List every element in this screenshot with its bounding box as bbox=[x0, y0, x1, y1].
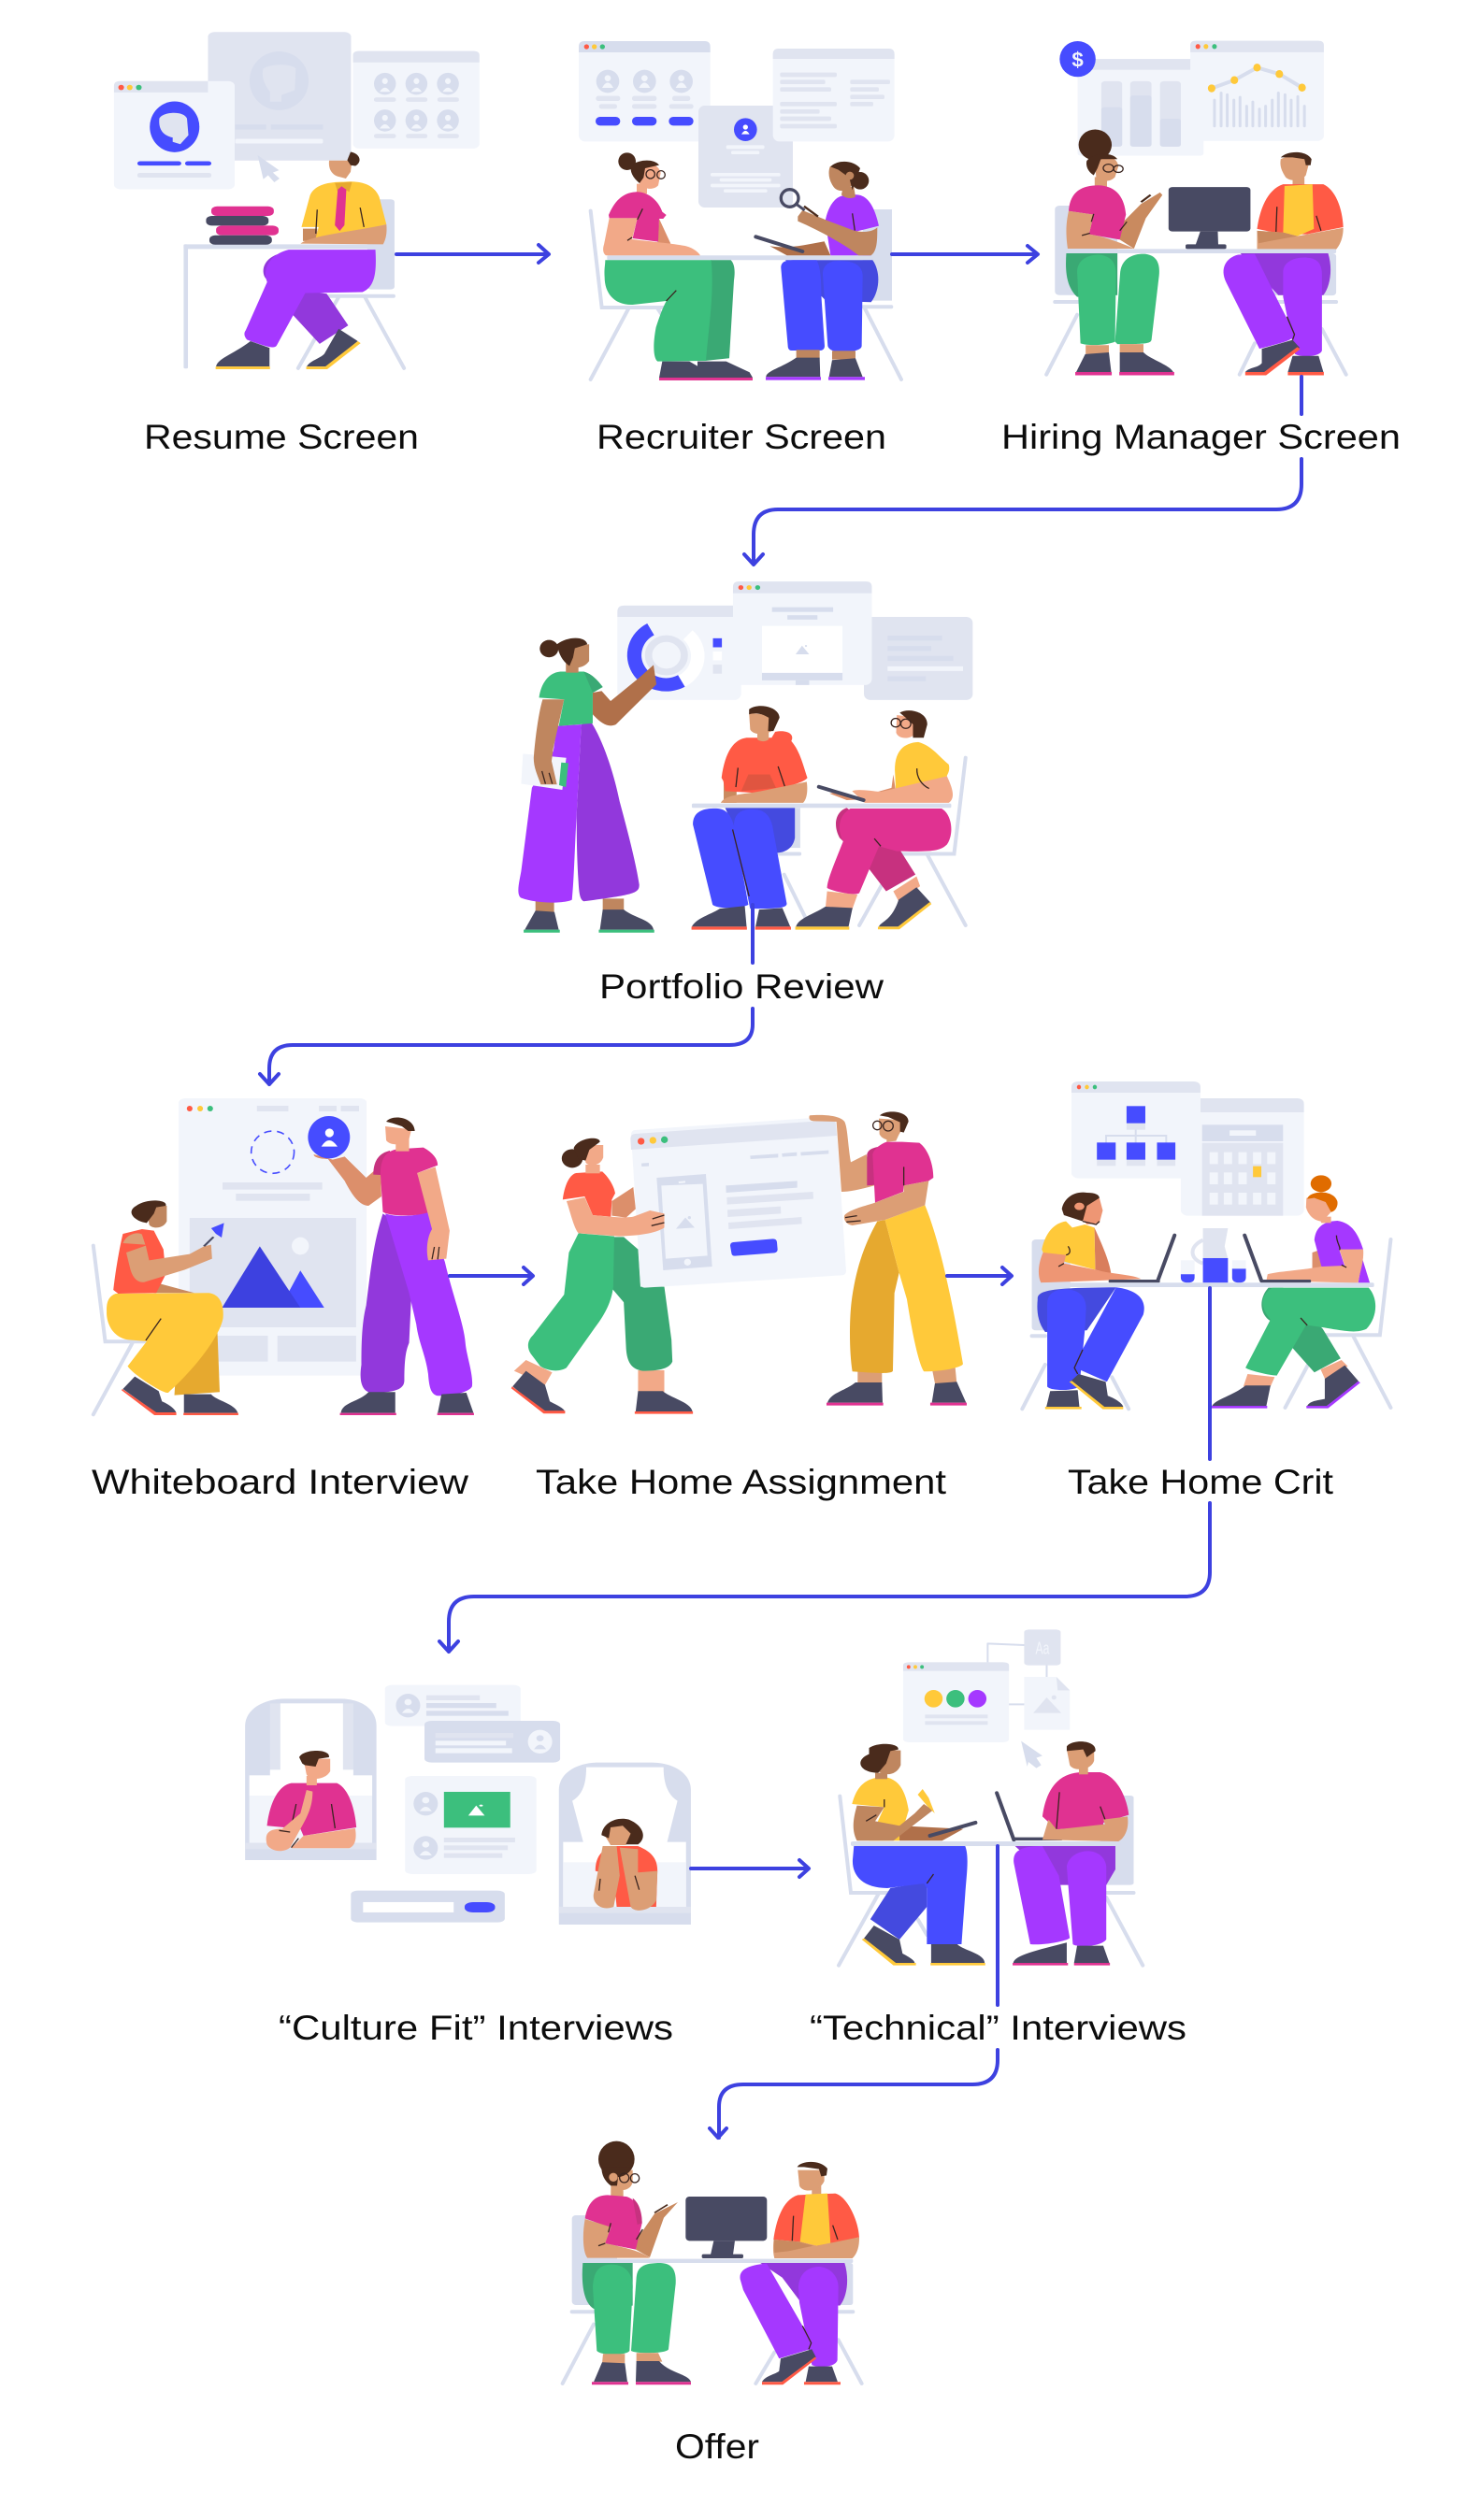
person: interviewer in pink with glasses bbox=[603, 152, 753, 380]
heading: Portfolio Review: Portfolio Review bbox=[599, 967, 884, 1006]
icon: monitor bbox=[685, 2197, 767, 2258]
scene: Resume Screen illustration bbox=[114, 32, 480, 369]
connector: technical to offer (upper) bbox=[996, 1846, 999, 2005]
heading: Recruiter Screen: Recruiter Screen bbox=[597, 418, 886, 456]
card: shared image chat bbox=[405, 1776, 537, 1874]
desk bbox=[851, 1841, 1120, 1846]
arrow: resume to recruiter bbox=[396, 245, 549, 263]
panel: large resume document bbox=[208, 32, 352, 161]
video call frame: man in pink bbox=[245, 1698, 377, 1860]
person: reviewer in yellow shirt with glasses bbox=[796, 710, 966, 930]
card: message 2 bbox=[424, 1721, 560, 1763]
panel: palette window bbox=[903, 1662, 1009, 1742]
chair left bbox=[563, 2215, 617, 2384]
chairs and desk bbox=[591, 209, 901, 379]
person: manager in pink bbox=[582, 2141, 691, 2384]
chair right bbox=[1240, 253, 1346, 375]
arrow: culture fit to technical bbox=[691, 1860, 809, 1877]
heading: Technical Interviews: “Technical” Interviews bbox=[810, 2009, 1186, 2047]
person: interviewer in purple with laptop bbox=[1212, 1175, 1390, 1409]
person: manager in orange jacket bbox=[1224, 152, 1344, 375]
person: candidate in orange jacket bbox=[740, 2162, 859, 2384]
heading: Take Home Crit: Take Home Crit bbox=[1068, 1463, 1334, 1501]
scene: Recruiter Screen illustration bbox=[579, 41, 901, 380]
icon: dollar badge bbox=[1059, 41, 1096, 77]
scene: Hiring Manager Screen illustration bbox=[1046, 41, 1346, 375]
scene: Offer illustration bbox=[563, 2141, 862, 2384]
person: interviewer standing in pink bbox=[308, 1116, 474, 1415]
connector: hiring manager to portfolio review (upper) bbox=[1300, 377, 1303, 414]
person: reviewer in orange hoodie bbox=[692, 706, 808, 930]
heading: Resume Screen: Resume Screen bbox=[144, 418, 419, 456]
scene: Technical Interviews illustration bbox=[839, 1629, 1143, 1966]
person: interviewer in purple with magnifier bbox=[755, 162, 879, 380]
stack of books bbox=[206, 207, 279, 245]
scene: Take Home Crit illustration bbox=[1022, 1081, 1390, 1410]
icon: monitor bbox=[1169, 187, 1250, 249]
card: message 1 bbox=[385, 1685, 521, 1726]
panel: whiteboard bbox=[179, 1098, 367, 1376]
person: hiring manager in pink bbox=[1066, 130, 1174, 375]
video call frame: woman in orange bbox=[559, 1763, 691, 1925]
desk bbox=[1041, 1282, 1374, 1287]
arrow: recruiter to hiring manager bbox=[892, 246, 1038, 263]
chair and desk bbox=[183, 199, 404, 368]
connector: portfolio review to whiteboard (upper) bbox=[751, 905, 755, 963]
person: candidate walking in green pants bbox=[511, 1138, 693, 1414]
icon: dollar badge: $ bbox=[1071, 49, 1084, 72]
panel: candidate profile window bbox=[114, 81, 235, 189]
heading: Whiteboard Interview: Whiteboard Interview bbox=[92, 1463, 468, 1501]
person: candidate in yellow with laptop bbox=[1022, 1193, 1174, 1410]
heading: Take Home Assignment: Take Home Assignment bbox=[536, 1463, 947, 1501]
chair right bbox=[755, 2263, 862, 2384]
search input bar bbox=[351, 1891, 505, 1923]
person: candidate seated with brush bbox=[93, 1200, 238, 1415]
chair left bbox=[1046, 206, 1117, 375]
icon: cursor bbox=[258, 155, 280, 182]
design system connectors and icons: Aa bbox=[1035, 1639, 1050, 1658]
scene: Whiteboard Interview illustration bbox=[93, 1098, 474, 1415]
person: colleague holding window bbox=[809, 1111, 967, 1406]
scene: Culture Fit Interviews illustration bbox=[245, 1685, 691, 1925]
arrow: technical interviews to offer bbox=[710, 2050, 998, 2138]
design system connectors and icons bbox=[987, 1629, 1070, 1730]
panel: text card bbox=[864, 617, 972, 700]
person: candidate in yellow with tablet bbox=[839, 1744, 985, 1966]
arrow: take home to crit bbox=[947, 1267, 1012, 1284]
chair behind orange person bbox=[779, 808, 806, 918]
person: left hand holding the window bbox=[567, 1197, 665, 1237]
scene: Take Home Assignment illustration bbox=[511, 1111, 967, 1414]
arrow: portfolio review to whiteboard bbox=[260, 1009, 753, 1084]
arrow: hiring manager to portfolio review bbox=[744, 459, 1301, 565]
panel: line chart window bbox=[1190, 41, 1324, 141]
panel: donut chart window bbox=[617, 606, 741, 700]
desk bbox=[692, 804, 951, 808]
panel: notes window bbox=[773, 49, 895, 141]
arrow: whiteboard to take home bbox=[450, 1267, 533, 1284]
scene: Portfolio Review illustration bbox=[518, 581, 972, 933]
panel: portfolio window bbox=[733, 581, 871, 685]
heading: Culture Fit Interviews: “Culture Fit” Interviews bbox=[279, 2009, 673, 2047]
panel: org chart window bbox=[1071, 1081, 1201, 1179]
desk bbox=[1069, 249, 1336, 253]
panel: calendar window bbox=[1181, 1098, 1304, 1216]
heading: Hiring Manager Screen: Hiring Manager Screen bbox=[1001, 418, 1401, 456]
panel: bar chart window bbox=[1078, 59, 1203, 155]
desk bbox=[586, 2259, 853, 2263]
arrow: take home crit to culture fit bbox=[439, 1503, 1210, 1652]
panel: candidates grid window bbox=[353, 51, 480, 149]
heading: Offer: Offer bbox=[675, 2427, 759, 2466]
icon: water jug and cups bbox=[1181, 1228, 1246, 1282]
panel: resume document bbox=[698, 106, 793, 208]
person: reviewer in yellow shirt bbox=[216, 151, 387, 369]
icon: cursor bbox=[1021, 1741, 1042, 1768]
panel: tilted assignment window bbox=[630, 1120, 842, 1283]
person: interviewer in pink with laptop bbox=[997, 1741, 1143, 1966]
person: presenter in green shirt bbox=[518, 638, 656, 933]
panel: candidates window bbox=[579, 41, 711, 141]
connector: take home crit to culture fit (upper) bbox=[1208, 1288, 1212, 1459]
